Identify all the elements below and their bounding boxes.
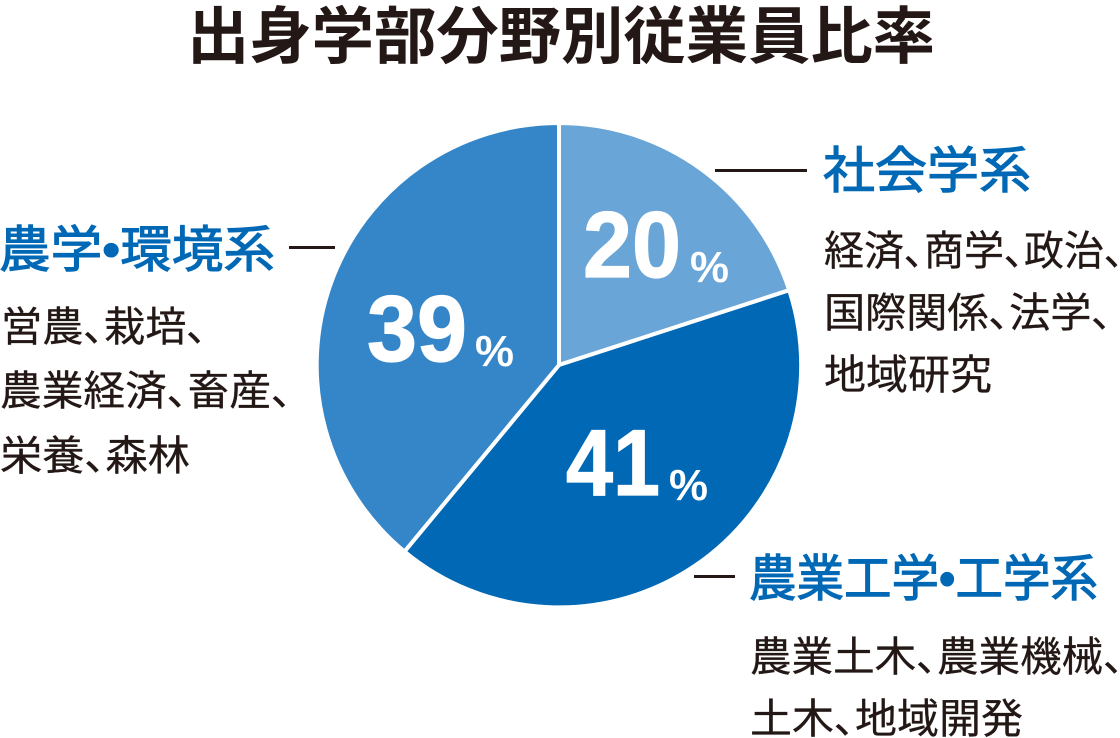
pie chart [317, 123, 801, 607]
label: agriculture and environment: 農業経済、畜産、 [0, 368, 292, 414]
slice: social sciences 20% [559, 123, 789, 365]
label: agricultural engineering [749, 551, 1120, 738]
label: social sciences: 国際関係、法学、 [824, 290, 1112, 336]
label: agricultural engineering: 農業土木、農業機械、 [750, 634, 1120, 680]
label: social sciences: 地域研究 [824, 352, 992, 398]
value: 20%: 20 [583, 192, 681, 297]
label: agriculture and environment: 農学•環境系 [0, 222, 275, 278]
slice: agricultural engineering 41% [404, 290, 801, 607]
label: social sciences [823, 143, 1120, 398]
leader line: agricultural engineering [694, 575, 735, 578]
value: 39%: 39 [367, 276, 467, 381]
leader line: agriculture and environment [289, 246, 335, 249]
slice: agriculture and environment 39% [317, 123, 559, 552]
label: agriculture and environment [0, 222, 292, 479]
leader line: social sciences [715, 169, 807, 172]
label: agricultural engineering: 農業工学•工学系 [749, 551, 1098, 607]
label: social sciences: 社会学系 [823, 143, 1031, 199]
label: agriculture and environment: 栄養、森林 [0, 433, 190, 479]
value: 41%: % [669, 461, 708, 510]
value: 20%: % [690, 243, 729, 292]
label: agriculture and environment: 営農、栽培、 [1, 304, 207, 350]
value: 39%: % [475, 327, 514, 376]
value: 41%: 41 [566, 410, 660, 515]
title: 出身学部分野別従業員比率 [187, 3, 935, 72]
